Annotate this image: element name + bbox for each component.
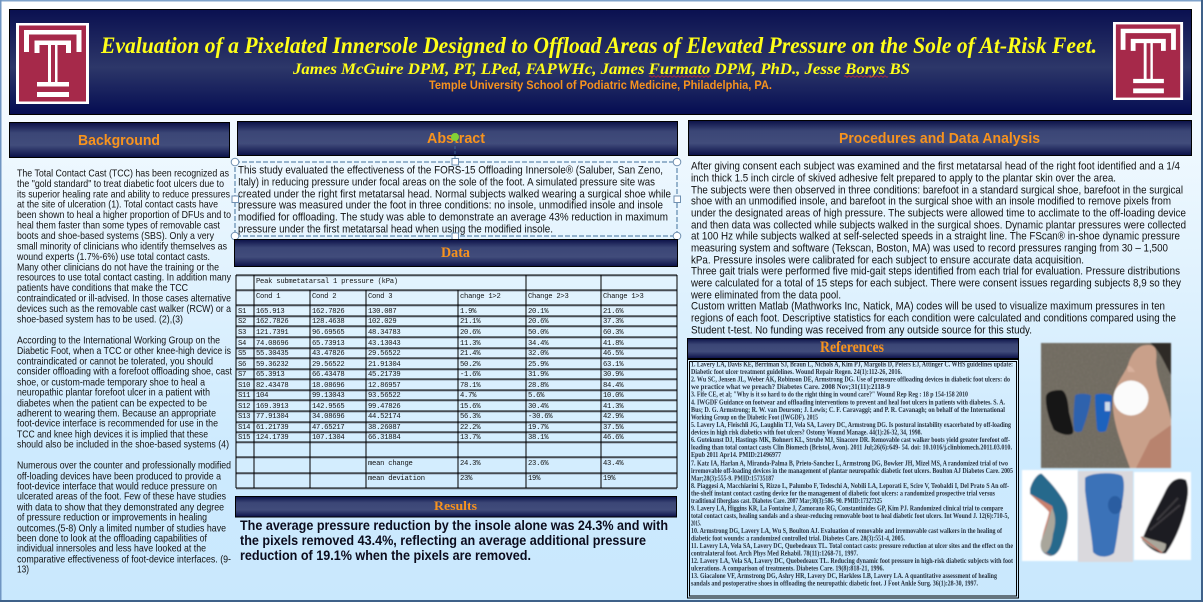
text block: background: The Total Contact Cast (TCC) has been recognized as <box>17 168 229 180</box>
data table: S11 <box>238 392 250 400</box>
heading: data <box>234 240 678 266</box>
reference list: traditional fiberglass cast. Diabetes Care. 2007 Mar;30(3):586- 90. PMID:17327325 <box>691 498 882 505</box>
text block: background: should also be included in the shoe-based systems (4) <box>17 440 229 451</box>
data table: 20.6% <box>460 329 481 337</box>
data table: 102.029 <box>368 318 396 326</box>
reference list: 5. Lavery LA, Fleischli JG, Laughlin TJ, Vela SA, Lavery DC, Armstrong DG. Is postural instability exacerbated by off-loading <box>691 422 1012 429</box>
text block: abstract: pressure was measured under the foot in three conditions: no insole, unmodified insole and insole <box>238 200 663 212</box>
text block: background: neuropathic plantar forefoot ulcer in a patient with <box>17 388 210 399</box>
data table: 19% <box>603 475 616 483</box>
text block: background: According to the International Working Group on the <box>17 336 220 346</box>
reference list: 8. Piaggesi A, Macchiarini S, Rizzo L, Palumbo F, Tedeschi A, Nobili LA, Leporati E, Scire V, Teobaldi I, Del Prato S An off- <box>691 483 1010 490</box>
data table: 107.1304 <box>312 434 344 442</box>
data table: 30.4% <box>528 403 549 411</box>
text block: procedures: kPa. Pressure insoles were calibrated for each subject to ensure accurate data acquisition. <box>691 254 1084 266</box>
heading: abstract: Abstract <box>427 131 485 147</box>
heading: results <box>236 496 676 517</box>
text block: background: Diabetic Foot, when a TCC or other knee-high device is <box>17 346 231 357</box>
data table: S15 <box>238 434 250 442</box>
text block: procedures: Custom written Matlab (Mathworks Inc, Natick, MA) codes will be used to visualize maximum pressures in ten <box>691 300 1165 312</box>
reference list: 6. Gutekunst DJ, Hastings MK, Bohnert KL, Strube MJ, Sinacore DR. Removable cast walker boots yield greater forefoot off- <box>691 437 1011 444</box>
data table: 43.47826 <box>312 350 344 358</box>
reference list: total contact casts, healing sandals and a shear-reducing removable boot to heal diabetic foot ulcers. Int Wound J. 12(6):710-5, <box>691 513 1009 520</box>
data table: S4 <box>238 340 246 348</box>
data table: 19.7% <box>528 424 549 432</box>
reference list: irremovable off-loading devices in the management of plantar neuropathic diabetic foot ulcers. Boulton AJ Diabetes Care. 2005 <box>691 468 1014 475</box>
text block: abstract: pressure under the first metatarsal head when using the modified insole. <box>238 224 553 236</box>
reference list: 10. Armstrong DG, Lavery LA, Wu S, Boulton AJ. Evaluation of removable and irremovable cast walkers in the healing of <box>691 528 1003 535</box>
data table: 44.52174 <box>368 413 400 421</box>
reference list: 2. Wu SC, Jensen JL, Weber AK, Robinson DE, Armstrong DG. Use of pressure offloading devices in diabetic foot ulcers: do <box>691 377 1011 384</box>
data table: 84.4% <box>603 382 624 390</box>
reference list: ulcerations. A comparison of treatments. Diabetes Care. 19(8):818-21, 1996. <box>691 566 884 572</box>
text block: background <box>16 168 232 576</box>
data table: Cond 1 <box>256 293 280 301</box>
data table: S5 <box>238 350 246 358</box>
data table: S6 <box>238 361 246 369</box>
text block: results: The average pressure reduction by the insole alone was 24.3% and with <box>240 518 668 533</box>
data table: 28.8% <box>528 382 549 390</box>
data table: 43.13043 <box>368 340 400 348</box>
data table: Change 1>3 <box>603 293 644 301</box>
data table: 130.087 <box>368 308 396 316</box>
text block: background: wound experts (1.7%-6%) use total contact casts. <box>16 252 210 263</box>
data table: 45.21739 <box>368 371 400 379</box>
reference list: Working Group on the Diabetic Foot (IWGDF). 2015 <box>691 414 818 421</box>
data table: 162.7826 <box>312 308 344 316</box>
text block: background: Numerous over the counter and professionally modified <box>17 460 231 472</box>
heading: background <box>10 122 230 158</box>
data table: 165.913 <box>256 308 284 316</box>
reference list <box>691 362 1014 588</box>
text block: background: consider offloading with a forefoot offloading shoe, cast <box>17 366 232 378</box>
text block: background: shoe-based system has to be used. (2),(3) <box>17 314 183 326</box>
data table: Peak submetatarsal 1 pressure (kPa) <box>256 278 398 286</box>
data table: 50.0% <box>528 329 549 337</box>
data table: 25.9% <box>528 361 549 369</box>
panel: background <box>10 122 232 576</box>
data table: 162.7826 <box>256 318 288 326</box>
data table: 43.4% <box>603 460 624 468</box>
icon: right Temple logo <box>1113 22 1183 100</box>
text block: procedures: were eliminated from the data pool. <box>690 290 841 302</box>
data table: 128.4638 <box>312 318 344 326</box>
data table: S1 <box>238 308 246 316</box>
affiliation: Temple University School of Podiatric Medicine, Philadelphia, PA. <box>429 80 772 92</box>
data table: 124.1739 <box>256 434 288 442</box>
data table: 5.6% <box>528 392 545 400</box>
photo: surgical shoe <box>1134 472 1191 560</box>
data table: 74.08696 <box>256 340 288 348</box>
reference list: we practice what we preach? Diabetes Care. 2008 Nov;31(11):2118-9 <box>691 384 891 391</box>
data table: 59.36232 <box>256 361 288 369</box>
text block: background: the "gold standard" to treat diabetic foot ulcers due to <box>17 179 224 190</box>
data table: 29.56522 <box>312 361 344 369</box>
reference list: 1. Lavery LA, Davis KE, Berriman SJ, Braun L, Nichols A, Kim PJ, Margolis D, Peters EJ, Attinger C. WHS guidelines update: <box>691 362 1013 368</box>
panel: procedures and data analysis <box>688 120 1192 336</box>
photo: foot with felt pad, shoe and insoles <box>1041 343 1171 468</box>
text block: background: with data to show that they demonstrated any degree <box>16 502 224 513</box>
data table: S2 <box>238 318 246 326</box>
text block: abstract <box>238 164 671 236</box>
data table: 46.6% <box>603 434 624 442</box>
selection frame with handles <box>231 133 681 240</box>
data table: 1.9% <box>460 308 477 316</box>
text block: background: foot-device interface is recommended for use in the <box>17 418 218 430</box>
title: Evaluation of a Pixelated Innersole Designed to Offload Areas of Elevated Pressure on the Sole of At-Risk Feet. <box>100 33 1097 59</box>
data table: 24.3% <box>460 460 481 468</box>
data table: 46.5% <box>603 350 624 358</box>
data table: 11.3% <box>460 340 481 348</box>
data table: 20.1% <box>528 308 549 316</box>
text block: background: off-loading devices have been produced to provide a <box>17 471 221 482</box>
heading: results: Results <box>434 498 477 513</box>
text block: procedures: shoe with an unmodified insole, and barefoot in the surgical shoe with an insole modified to remove pixels from <box>691 196 1171 208</box>
text block: procedures: regions of each foot. Descriptive statistics for each condition were calculated and conditions compared using the <box>691 312 1176 324</box>
data table: 99.13043 <box>312 392 344 400</box>
text block: background: adherent to wearing them. Because an appropriate <box>17 408 216 419</box>
text block: background: at the site of ulceration (1). Total contact casts have <box>17 200 218 211</box>
text block: background: TCC and knee high devices it is implied that these <box>17 429 208 440</box>
data table: 32.0% <box>528 350 549 358</box>
panel: results <box>236 496 676 563</box>
text block: background: foot-device interface that would reduce pressure on <box>17 482 217 492</box>
data table: 30.9% <box>603 371 624 379</box>
text block: background: been done to look at the offloading capabilities of <box>17 534 207 544</box>
data table: change 1>2 <box>460 293 501 301</box>
text block: background: resources to use total contact casting. In addition many <box>17 273 232 284</box>
reference list: Bus; D. G. Armstrong; R. W. van Deursen; J. Lewis; C. F. Caravaggi; and P. R. Cavanagh; on behalf of the International <box>691 407 1005 414</box>
data table: 21.6% <box>603 308 624 316</box>
text block: procedures: measuring system and software (Tekscan, Boston, MA) was used to record pressures ranging from 30 – 1,500 <box>691 242 1168 254</box>
data table: 60.3% <box>603 329 624 337</box>
data table: 21.91304 <box>368 361 400 369</box>
data table: 13.7% <box>460 434 481 442</box>
data table: Change 2>3 <box>528 293 569 301</box>
reference list: 11. Lavery LA, Vela SA, Lavery DC, Quebedeaux TL. Total contact casts: pressure reduction at ulcer sites and the effect on the <box>691 543 1013 550</box>
reference list: loading than total contact casts Clin Biomech (Bristol, Avon). 2011 Jul;26(6):649- 54. doi: 10.1016/j.clinbiomech.2011.03.010. <box>691 445 1012 452</box>
text block: background: heal them faster than some types of removable cast <box>17 221 220 232</box>
text block: background: contraindicated or cannot be tolerated, you should <box>17 356 213 367</box>
authors: James McGuire DPM, PT, LPed, FAPWHc, James Furmato DPM, PhD., Jesse Borys BS <box>292 61 910 78</box>
text block: results: the pixels removed 43.4%, reflecting an average additional pressure <box>240 533 646 548</box>
text block: abstract: Italy) in reducing pressure under focal areas on the sole of the foot. A simulated pressure site was <box>238 176 655 188</box>
panel: data <box>234 240 678 489</box>
data table: 29.56522 <box>368 350 400 358</box>
reference list: 9. Lavery LA, Higgins KR, La Fontaine J, Zamorano RG, Constantinides GP, Kim PJ. Randomized clinical trial to compare <box>691 506 1003 512</box>
data table: 61.21739 <box>256 424 288 432</box>
data table: 56.3% <box>460 413 481 421</box>
heading: background: Background <box>78 133 160 149</box>
heading: references <box>688 338 1018 358</box>
data table: 66.31884 <box>368 434 400 442</box>
header banner <box>10 10 1192 114</box>
data table: mean deviation <box>368 475 425 483</box>
text block: background: its superior healing rate and ability to reduce pressures <box>17 189 230 200</box>
data table: 78.1% <box>460 382 481 390</box>
data table: 19% <box>528 475 541 483</box>
text block: abstract: This study evaluated the effectiveness of the FORS-15 Offloading Innersole® (Saluber, San Zeno, <box>238 164 663 176</box>
data table: S10 <box>238 382 250 390</box>
data table: 18.08696 <box>312 382 344 390</box>
reference list frame <box>688 360 1018 598</box>
text block: background: diabetes when the patient can be expected to be <box>17 398 207 409</box>
data table: 37.3% <box>603 318 624 326</box>
data table: 34.4% <box>528 340 549 348</box>
data table: mean change <box>368 460 413 468</box>
data table: 34.08696 <box>312 413 344 421</box>
data table: 4.7% <box>460 392 477 400</box>
heading: procedures: Procedures and Data Analysis <box>839 131 1040 147</box>
data table: 48.34783 <box>368 329 400 337</box>
text block: abstract: created under the right first metatarsal head. Normal subjects walked wearing a surgical shoe while <box>238 188 671 200</box>
data table: 38.26087 <box>368 424 400 432</box>
data table: -1.6% <box>460 371 481 379</box>
data table: 96.69565 <box>312 329 344 337</box>
data table: 23.6% <box>528 460 549 468</box>
text block: background: been shown to heal a higher proportion of DFUs and to <box>17 210 231 221</box>
data table: 55.30435 <box>256 350 288 358</box>
reference list: sandals and postoperative shoes in offloading the neuropathic diabetic foot. J Foot Ankle Surg. 36(1):28-30, 1997. <box>691 580 978 588</box>
text block: background: patients have conditions that make the TCC <box>17 283 188 294</box>
data table: 21.4% <box>460 350 481 358</box>
reference list: devices in high risk diabetics with foot ulcers? Ostomy Wound Manage. 44(1):26-32, 34, 1998. <box>691 430 922 436</box>
heading: procedures <box>688 120 1192 156</box>
data table: 10.0% <box>603 392 624 400</box>
data table: 47.65217 <box>312 424 344 432</box>
data table: 99.47826 <box>368 403 400 411</box>
reference list: contralateral foot. Arch Phys Med Rehabil. 78(11):1268-71, 1997. <box>691 550 858 558</box>
text block: background: outcomes.(5-8) Only a limited number of studies have <box>17 523 226 534</box>
data table: 38.1% <box>528 434 549 442</box>
data table: S14 <box>238 424 250 432</box>
data table: S7 <box>238 371 246 379</box>
data table: S13 <box>238 413 250 421</box>
text block: background: boots and shoe-based systems (SBS). Only a very <box>17 231 215 242</box>
reference list: 13. Giacalone VF, Armstrong DG, Ashry HR, Lavery DC, Harkless LB, Lavery LA. A quantitative assessment of healing <box>691 573 998 580</box>
data table: 41.8% <box>603 340 624 348</box>
reference list: diabetic foot wounds: a randomized controlled trial. Diabetes Care. 28(3):551-4, 2005. <box>691 536 905 542</box>
reference list: Epub 2011 Apr14. PMID:21496977 <box>691 452 782 459</box>
text block: background: ulcerated areas of the foot. Few of these have studies <box>17 492 226 503</box>
data table: S12 <box>238 403 250 411</box>
data table: Cond 3 <box>368 293 392 301</box>
data table: 12.86957 <box>368 382 400 390</box>
spell-check underlines <box>649 76 888 77</box>
reference list: 12. Lavery LA, Vela SA, Lavery DC, Quebedeaux TL. Reducing dynamic foot pressure in high-risk diabetic subjects with foot <box>691 558 1014 565</box>
data table: 41.3% <box>603 403 624 411</box>
data table: 50.2% <box>460 361 481 369</box>
photo: insole side view <box>1022 470 1078 561</box>
text block: background: devices such as the removable cast walker (RCW) or a <box>17 304 231 315</box>
text block: background: shoe, or custom-made temporary shoe to heal a <box>17 377 205 388</box>
data table: 31.9% <box>528 371 549 379</box>
text block: background: individual innersoles and less have looked at the <box>17 544 206 555</box>
data table: 65.3913 <box>256 371 284 379</box>
reference list: 3. Fife CE, et al; "Why is it so hard to do the right thing in wound care?" Wound Rep Reg : 18 p 154-158 2010 <box>691 392 969 399</box>
reference list: Mar;28(3):555-9. PMID:15735187 <box>691 476 774 482</box>
data table: 22.2% <box>460 424 481 432</box>
panel: references <box>688 338 1018 598</box>
text block: background: contraindicated or ill-advised. In those cases alternative <box>17 294 231 304</box>
panel: abstract <box>231 122 681 240</box>
text block: background: small minority of clinicians who identify themselves as <box>17 242 227 252</box>
data table: 93.56522 <box>368 392 400 400</box>
data table: 121.7391 <box>256 329 288 337</box>
reference list: 7. Katz IA, Harlan A, Miranda-Palma B, Prieto-Sanchez L, Armstrong DG, Bowker JH, Mizel MS, A randomized trial of two <box>691 460 1009 468</box>
text block: background: of pressure reduction or improvements in healing <box>17 512 207 523</box>
data table: 15.6% <box>460 403 481 411</box>
icon: left Temple logo <box>16 23 89 104</box>
heading: abstract <box>238 122 678 156</box>
heading: references: References <box>820 339 884 356</box>
data table: 37.5% <box>603 424 624 432</box>
text block: background: Many other clinicians do not have the training or the <box>17 262 219 273</box>
text block: procedures <box>690 160 1186 336</box>
data table: 77.91304 <box>256 413 288 421</box>
data table: 104 <box>256 392 268 400</box>
data table: 82.43478 <box>256 382 288 390</box>
data table: 66.43478 <box>312 371 344 379</box>
text block: procedures: inch thick 1.5 inch circle of skived adhesive felt prepared to apply to the plantar skin over the area. <box>691 172 1116 184</box>
data table: 65.73913 <box>312 340 344 348</box>
text block: procedures: Student t-test. No funding was received from any outside source for this study. <box>691 324 1032 336</box>
data table: 21.1% <box>460 318 481 326</box>
data table: 142.9565 <box>312 403 344 411</box>
reference list: 4. IWGDF Guidance on footwear and offloading interventions to prevent and heal foot ulcers in patients with diabetes. S. A. <box>691 399 1005 406</box>
photo: insole top view <box>1078 471 1133 562</box>
text block: results: reduction of 19.1% when the pixels are removed. <box>240 548 531 563</box>
data table: S3 <box>238 329 246 337</box>
reference list: 2015. <box>691 520 701 528</box>
reference list: the-shelf instant contact casting device for the management of diabetic foot ulcers: a randomized prospective trial versus <box>691 490 995 498</box>
text block: results <box>240 518 668 563</box>
data table: 169.3913 <box>256 403 288 411</box>
data table: 23% <box>460 475 473 483</box>
data table: 20.6% <box>528 318 549 326</box>
data table: Cond 2 <box>312 293 336 301</box>
text block: background: 13) <box>17 564 29 576</box>
data table: 63.1% <box>603 361 624 369</box>
reference list: Diabetic foot ulcer treatment guidelines. Wound Repair Regen. 24(1):112-26, 2016. <box>691 369 902 376</box>
data table: 42.9% <box>603 413 624 421</box>
data table: -30.6% <box>528 413 553 421</box>
text block: abstract: modified for offloading. The study was able to demonstrate an average 43% reduction in maximum <box>238 212 668 224</box>
data table <box>236 275 677 489</box>
heading: data: Data <box>441 245 471 261</box>
text block: background: comparative effectiveness of foot-device interfaces. (9- <box>17 554 231 565</box>
